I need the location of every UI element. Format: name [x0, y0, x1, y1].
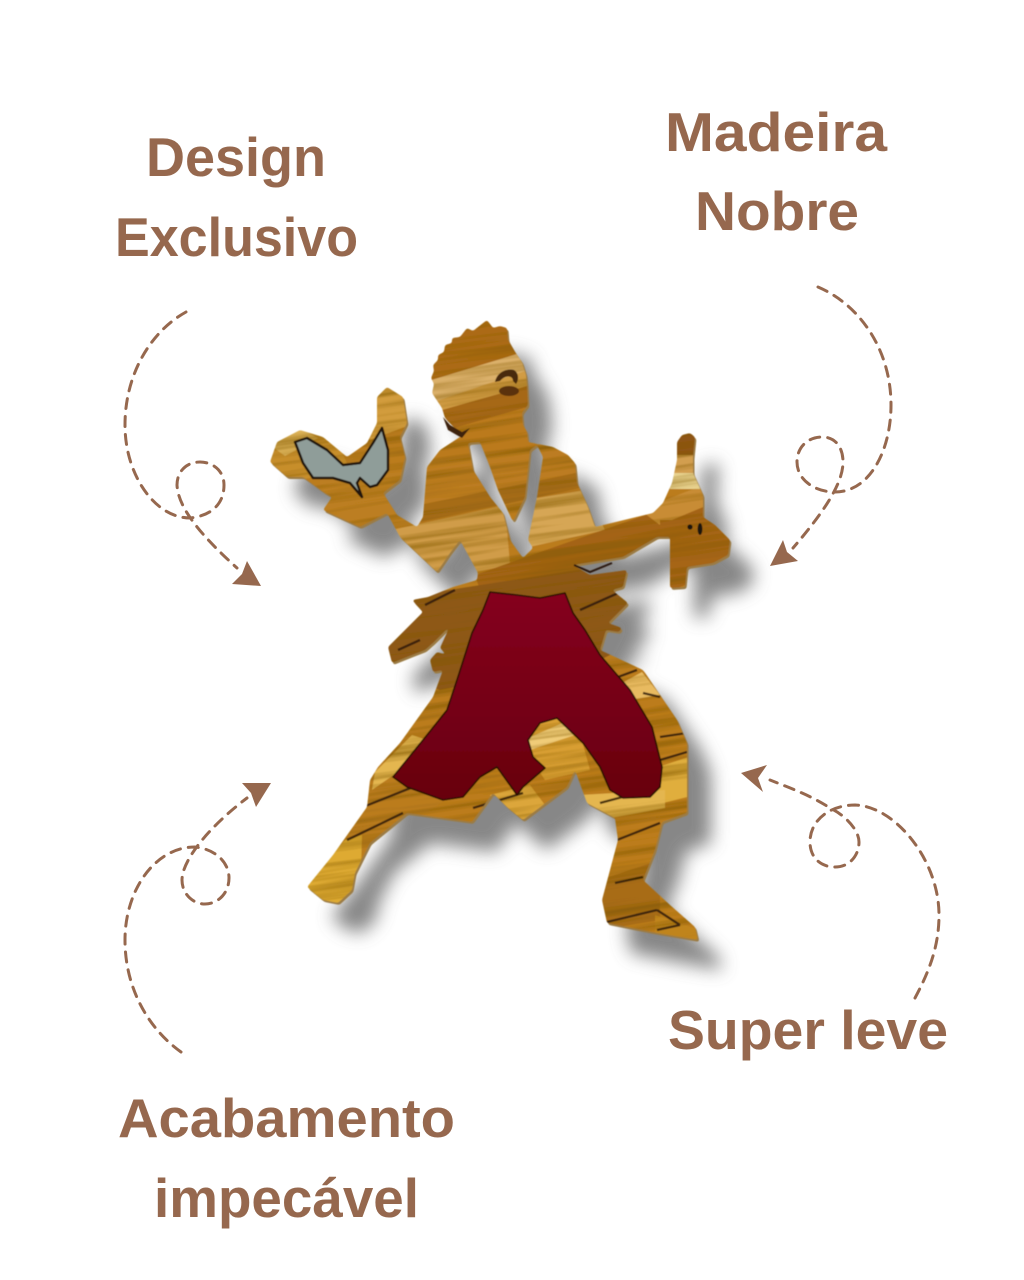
heading: Acabamento impecavel: Acabamento — [118, 1087, 455, 1149]
heading: Design Exclusivo — [115, 126, 358, 268]
heading: Super leve: Super leve — [668, 999, 948, 1061]
leg wood bands — [308, 666, 696, 936]
hen gray inset — [295, 428, 388, 497]
head wood bands — [431, 320, 530, 458]
arrow: madeira nobre to figure — [770, 287, 891, 566]
dark grain lines — [347, 590, 687, 930]
arrow: acabamento to figure — [125, 783, 271, 1052]
arrow: super leve to figure — [741, 765, 939, 998]
arrow: design exclusivo to figure — [125, 312, 261, 586]
instrument wood — [475, 430, 735, 595]
heading: Design Exclusivo: Exclusivo — [115, 206, 358, 268]
heading: Acabamento impecavel: impecável — [154, 1167, 419, 1229]
head details: ear and mouth — [443, 370, 519, 438]
hen wood — [270, 388, 410, 522]
heading: Madeira Nobre — [665, 101, 887, 242]
heading: Acabamento impecavel — [118, 1087, 455, 1229]
red trousers inset — [393, 592, 662, 800]
skirt wood — [388, 568, 627, 690]
wood texture — [270, 320, 730, 940]
heading: Madeira Nobre: Madeira — [665, 101, 887, 163]
grain overlay — [272, 322, 730, 930]
wooden figure — [270, 320, 732, 942]
heading: Madeira Nobre: Nobre — [695, 180, 859, 242]
instrument holes — [574, 523, 702, 572]
torso wood bands — [396, 460, 606, 572]
figure edge depth — [272, 322, 732, 942]
heading: Design Exclusivo: Design — [146, 126, 326, 188]
figure shadow — [294, 350, 754, 970]
